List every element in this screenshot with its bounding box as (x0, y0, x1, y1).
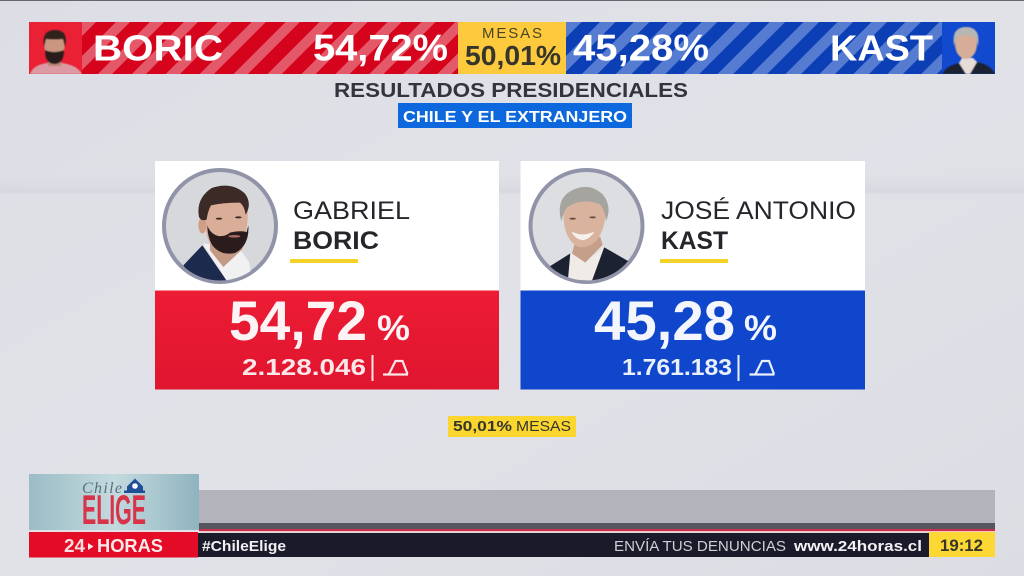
panel: Kast card (520, 161, 865, 390)
logo word: ELIGE: ELIGE (82, 486, 146, 533)
red line (199, 529, 995, 531)
mesas counter (458, 22, 566, 74)
name: KAST: KAST (830, 28, 933, 68)
value: 50,01%: 50,01% (465, 40, 561, 71)
divider (738, 355, 740, 381)
percentage: 45,28: 45,28 (594, 289, 735, 352)
icon: ballot box (383, 361, 408, 374)
icon: star house (124, 478, 145, 493)
icon: ballot box (750, 361, 774, 374)
word HORAS: HORAS (97, 536, 163, 556)
website: www.24horas.cl (793, 538, 922, 555)
divider (372, 355, 374, 381)
grey band (199, 490, 995, 523)
dark stripe (199, 523, 995, 529)
percentage: 54,72%: 54,72% (313, 28, 448, 68)
logo: Chile Elige (29, 474, 199, 533)
Kast segment (566, 22, 995, 74)
top results bar (29, 22, 995, 74)
arrow (88, 543, 94, 550)
logo script: Chile: Chile (82, 480, 122, 497)
percentage: 45,28%: 45,28% (573, 28, 709, 68)
percent sign: % (377, 309, 410, 348)
name: Boric: BORIC (293, 227, 379, 255)
ticker bar (198, 533, 929, 557)
label: MESAS: MESAS (482, 25, 542, 42)
lower third (29, 474, 995, 558)
percent sign: % (744, 309, 777, 348)
value: 50,01% (453, 418, 512, 435)
name: BORIC: BORIC (93, 28, 223, 68)
votes: 1.761.183: 1.761.183 (622, 354, 732, 380)
photo: Gabriel Boric (164, 170, 276, 285)
votes: 2.128.046: 2.128.046 (242, 354, 366, 380)
label: MESAS (516, 418, 571, 435)
yellow underline (290, 259, 358, 263)
24 horas brand (29, 532, 198, 558)
percentage: 54,72: 54,72 (229, 289, 367, 352)
pink line (199, 531, 995, 532)
badge: Chile y el extranjero: CHILE Y EL EXTRANJERO (403, 109, 627, 126)
name: Kast: KAST (661, 227, 728, 255)
name: Gabriel: GABRIEL (293, 197, 410, 225)
hashtag: #ChileElige (202, 538, 286, 555)
ticker message: ENVÍA TUS DENUNCIAS (614, 538, 786, 555)
icon: Kast small portrait (942, 22, 995, 74)
clock (929, 532, 995, 557)
heading: resultados presidenciales: RESULTADOS PRESIDENCIALES (334, 80, 688, 102)
name: José Antonio: JOSÉ ANTONIO (661, 196, 856, 225)
icon: Boric small portrait (29, 22, 82, 74)
Boric segment (29, 22, 458, 74)
yellow underline (660, 259, 728, 263)
number 24: 24 (64, 536, 85, 556)
clock: 19:12 (940, 536, 983, 555)
badge: Chile y el extranjero (398, 103, 632, 128)
badge: 50,01% mesas (448, 416, 576, 437)
photo: José Antonio Kast (530, 170, 642, 282)
panel: Boric card (155, 161, 499, 390)
